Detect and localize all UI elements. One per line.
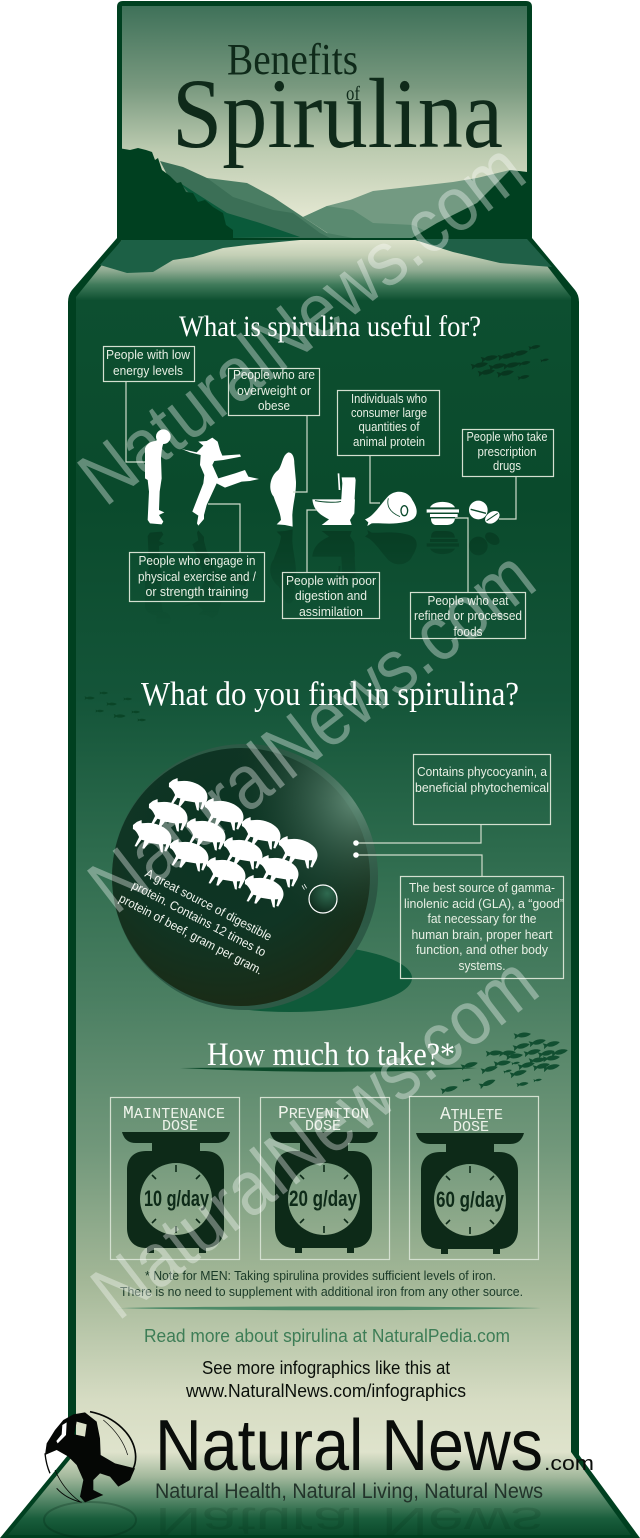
callout: exercise: or strength training	[146, 585, 249, 599]
heading: how much to take: How much to take?*	[207, 1037, 455, 1073]
watermark bottom: NaturalNews.com	[76, 939, 553, 1335]
logo wordmark: .com	[544, 1453, 594, 1475]
callout: digestion	[282, 572, 380, 619]
callout: refined foods	[410, 592, 526, 639]
callout: overweight	[228, 368, 320, 416]
equals sign and tablet	[297, 882, 337, 913]
heading: what do you find: What do you find in spirulina?	[141, 676, 519, 713]
callout: overweight: overweight or	[237, 384, 311, 398]
see more text: www.NaturalNews.com/infographics	[185, 1381, 466, 1401]
divider	[117, 1306, 541, 1310]
lake reflections	[100, 239, 552, 273]
dose card: maintenance: MAINTENANCE	[123, 1104, 225, 1124]
dose card: athlete: 60 g/day	[436, 1187, 505, 1212]
logo wordmark: Natural News	[155, 1406, 543, 1486]
callout: prescription drugs: prescription	[478, 445, 537, 459]
callout: prescription drugs: drugs	[493, 459, 521, 473]
title: Benefits	[227, 35, 358, 84]
iron note: There is no need to supplement with additional iron from any other source.	[120, 1284, 523, 1299]
spirulina tablet sphere	[112, 744, 378, 1010]
fish shoal top right	[471, 344, 549, 380]
callout: digestion: digestion and	[295, 589, 367, 603]
main body panel	[68, 238, 579, 1460]
callout: refined foods: refined or processed	[414, 609, 522, 623]
callout: animal protein: quantities of	[358, 420, 420, 434]
callout: GLA: fat necessary for the	[428, 912, 537, 926]
callout: exercise	[130, 552, 264, 602]
title: of	[346, 83, 360, 105]
callout: GLA: human brain, proper heart	[412, 928, 553, 942]
callout: overweight: People who are	[233, 368, 315, 382]
dose card: maintenance: DOSE	[162, 1118, 198, 1135]
callout: digestion: People with poor	[286, 574, 376, 588]
callout: animal protein: Individuals who	[351, 392, 427, 406]
dose card: maintenance: 10 g/day	[144, 1186, 210, 1211]
callout: low energy: energy levels	[113, 364, 183, 378]
callout: prescription drugs	[462, 430, 554, 476]
sphere shadow	[168, 944, 412, 1012]
callout: phycocyanin: beneficial phytochemical	[415, 781, 549, 795]
dose card: athlete: ATHLETE	[440, 1105, 503, 1125]
callout: GLA: linolenic acid (GLA), a “good”	[404, 897, 564, 911]
rotated protein text: protein. Contains 12 times to	[130, 878, 268, 959]
see more text	[185, 1358, 466, 1401]
dose card: prevention: DOSE	[305, 1118, 341, 1135]
callout: GLA: systems.	[458, 959, 506, 973]
silhouettes of people, toilet, ham, burger and pills	[145, 429, 500, 575]
silhouette reflections	[148, 530, 500, 575]
see more text: See more infographics like this at	[202, 1358, 450, 1378]
callout: digestion: assimilation	[299, 605, 363, 619]
iron note: * Note for MEN: Taking spirulina provides sufficient levels of iron.	[145, 1268, 496, 1283]
title: Spirulina	[172, 58, 503, 169]
watermark top: NaturalNews.com	[63, 125, 540, 521]
callout: phycocyanin: Contains phycocyanin, a	[417, 765, 547, 779]
callout: animal protein: animal protein	[353, 435, 425, 449]
iron note	[120, 1268, 523, 1299]
callout: GLA: function, and other body	[416, 943, 549, 957]
bottom floor	[0, 1452, 640, 1538]
callout: animal protein: consumer large	[351, 406, 427, 420]
callout: GLA: The best source of gamma-	[409, 881, 555, 895]
rotated protein text: protein of beef, gram per gram.	[117, 891, 265, 978]
callout: animal protein	[338, 390, 440, 456]
watermark middle: NaturalNews.com	[73, 533, 550, 929]
callout: GLA	[400, 876, 564, 978]
herd of twelve cows	[128, 776, 321, 910]
connectors with dots	[353, 825, 482, 876]
equals sign and tablet: =	[297, 882, 310, 893]
callout: refined foods: People who eat	[428, 594, 509, 608]
fish shoal left	[85, 692, 146, 722]
callout: exercise: People who engage in	[138, 554, 256, 568]
dose card: prevention: 20 g/day	[289, 1186, 358, 1211]
logo: Natural News globe	[45, 1412, 136, 1502]
heading: what is spirulina useful for: What is spirulina useful for?	[179, 310, 481, 343]
callout: prescription drugs: People who take	[466, 430, 548, 444]
callout: refined foods: foods	[454, 625, 482, 639]
dose card: athlete	[410, 1096, 538, 1260]
dose card: prevention: PREVENTION	[278, 1104, 369, 1124]
logo tagline: Natural Health, Natural Living, Natural News	[155, 1480, 543, 1503]
callout: overweight: obese	[258, 399, 290, 413]
callout: low energy: People with low	[106, 348, 191, 362]
dose card: maintenance	[110, 1098, 240, 1260]
callout: low energy	[104, 346, 194, 382]
callout: phycocyanin	[414, 754, 550, 824]
callouts: who benefits	[104, 346, 554, 639]
rotated protein text: A great source of digestible	[143, 866, 274, 944]
read more link: Read more about spirulina at NaturalPedia.com	[144, 1326, 510, 1346]
dose card: athlete: DOSE	[453, 1119, 489, 1136]
callout: exercise: physical exercise and /	[138, 570, 256, 584]
mountains	[118, 148, 532, 238]
dose card: prevention	[260, 1098, 390, 1260]
top landscape panel	[117, 1, 532, 240]
connector lines	[126, 381, 516, 592]
fish shoal right	[441, 1031, 568, 1094]
